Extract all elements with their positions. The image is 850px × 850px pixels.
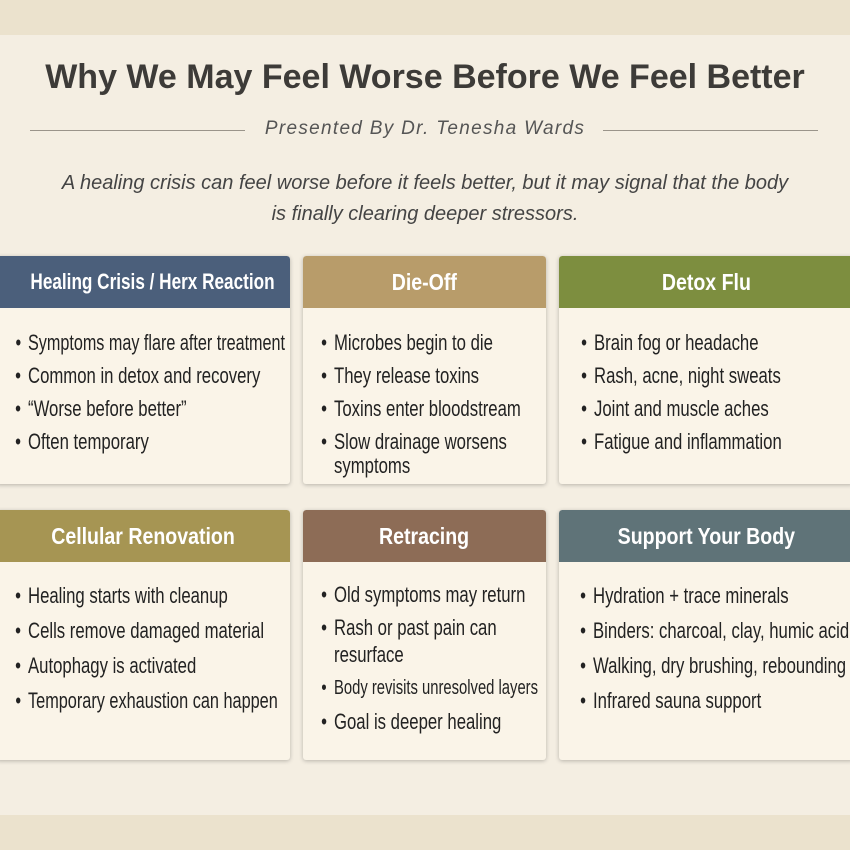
panel: die-off: They release toxins: [334, 363, 479, 388]
panel: healing crisis: Symptoms may flare after treatment: [28, 330, 285, 355]
panel: healing crisis: Common in detox and recovery: [28, 363, 260, 388]
intro text: A healing crisis can feel worse before it feels better, but it may signal that the body: [62, 172, 788, 194]
panel: cellular renovation: Autophagy is activated: [28, 653, 196, 678]
panel: support your body: [559, 510, 850, 760]
panel: cellular renovation: Cellular Renovation: [51, 523, 235, 549]
panel: retracing: Retracing: [379, 523, 470, 549]
panel: cellular renovation: Temporary exhaustion can happen: [28, 688, 278, 713]
panel: die-off: Slow drainage worsens: [334, 429, 507, 454]
panel: healing crisis: “Worse before better”: [28, 396, 187, 421]
intro text: is finally clearing deeper stressors.: [272, 203, 578, 225]
panel: detox flu: [559, 256, 850, 484]
panel: healing crisis: Often temporary: [28, 429, 149, 454]
title: Why We May Feel Worse Before We Feel Better: [45, 58, 805, 96]
panel: detox flu: Joint and muscle aches: [594, 396, 769, 421]
panel: retracing: Body revisits unresolved layers: [334, 677, 538, 699]
panel: healing crisis: [0, 256, 290, 484]
panel: retracing: Goal is deeper healing: [334, 709, 501, 734]
panel: detox flu: Rash, acne, night sweats: [594, 363, 781, 388]
panel: support your body: Binders: charcoal, clay, humic acid: [593, 618, 849, 643]
panel: cellular renovation: Cells remove damaged material: [28, 618, 264, 643]
panel: retracing: [303, 510, 546, 760]
panel: detox flu: Fatigue and inflammation: [594, 429, 782, 454]
panel: die-off: Die-Off: [392, 269, 457, 295]
panel: support your body: Walking, dry brushing, rebounding: [593, 653, 846, 678]
panel: cellular renovation: [0, 510, 290, 760]
panel: detox flu: Detox Flu: [662, 269, 751, 295]
panel: retracing: resurface: [334, 642, 404, 667]
panel: retracing: Old symptoms may return: [334, 582, 525, 607]
panel: die-off: Microbes begin to die: [334, 330, 493, 355]
panel: retracing: Rash or past pain can: [334, 615, 497, 640]
panel: support your body: Hydration + trace minerals: [593, 583, 789, 608]
panel: cellular renovation: Healing starts with cleanup: [28, 583, 228, 608]
panel: detox flu: Brain fog or headache: [594, 330, 759, 355]
panel: support your body: Infrared sauna support: [593, 688, 761, 713]
panel: die-off: Toxins enter bloodstream: [334, 396, 521, 421]
panel: die-off: [303, 256, 546, 484]
panel: die-off: symptoms: [334, 453, 410, 478]
intro text: [61, 172, 790, 225]
subtitle: Presented By Dr. Tenesha Wards: [265, 118, 585, 139]
panel: healing crisis: Healing Crisis / Herx Reaction: [30, 269, 275, 294]
panel: support your body: Support Your Body: [618, 523, 795, 549]
